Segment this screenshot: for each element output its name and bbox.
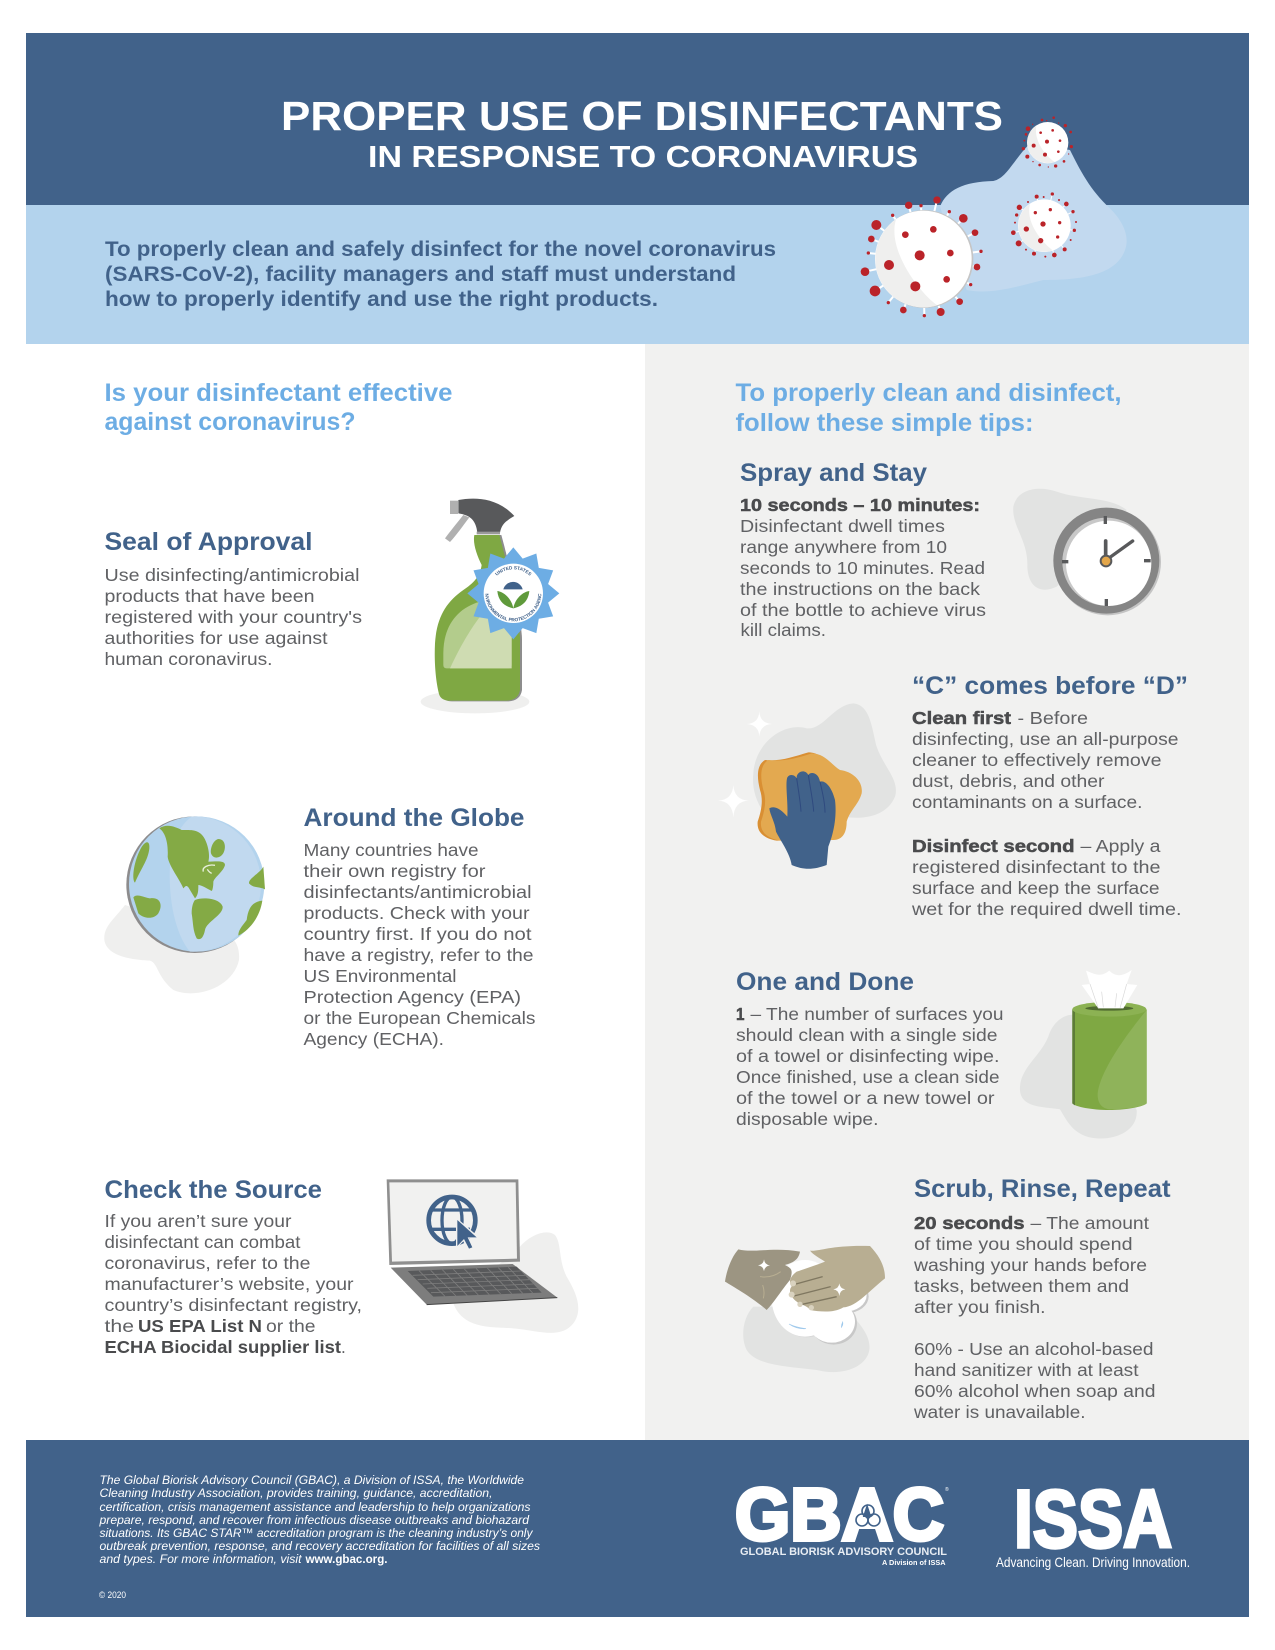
footer text: The Global Biorisk Advisory Council (GBAC), a Division of ISSA, the Worldwide [100,1473,524,1487]
section: one and done text: One and Done [736,968,914,996]
section: around the globe text [304,804,536,1049]
section: spray and stay text: the instructions on the back [740,579,980,599]
section: scrub rinse repeat text: tasks, between them and [914,1276,1129,1296]
section: spray and stay text: 10 seconds – 10 minutes: [740,495,980,515]
copyright: © 2020 [99,1590,126,1600]
section: seal of approval text: registered with your country's [104,607,362,627]
section: seal of approval text: authorities for use against [104,628,328,648]
panel: header [26,33,1249,344]
section: around the globe text: Around the Globe [304,804,525,832]
section: scrub rinse repeat text: 20 seconds [914,1213,1025,1233]
section: C comes before D text: wet for the required dwell time. [911,899,1182,919]
section: C comes before D text [911,672,1188,919]
section: check the source text: . [341,1337,346,1357]
section: seal of approval text: Seal of Approval [104,528,312,556]
section: C comes before D text: Disinfect second [912,836,1074,856]
logo: ISSA: Advancing Clean. Driving Innovation. [996,1554,1190,1570]
section: around the globe text: Protection Agency (EPA) [304,987,521,1007]
section: check the source text: coronavirus, refer to the [104,1253,310,1273]
footer text: Cleaning Industry Association, provides training, guidance, accreditation, [100,1486,492,1500]
section: seal of approval text [104,528,362,669]
footer text: prepare, respond, and recover from infectious disease outbreaks and biohazard [99,1513,530,1527]
section: scrub rinse repeat text: 60% - Use an alcohol-based [914,1339,1154,1359]
logo: GBAC: GLOBAL BIORISK ADVISORY COUNCIL [740,1546,947,1558]
section: C comes before D text: Clean first [912,708,1011,728]
section: spray and stay text: seconds to 10 minutes. Read [740,558,985,578]
panel: footer [26,1440,1249,1617]
icon: clock [1013,489,1161,615]
section: spray and stay text [740,459,986,640]
section: C comes before D text: contaminants on a surface. [912,792,1142,812]
section: around the globe text: have a registry, refer to the [304,945,534,965]
section: spray and stay text: Spray and Stay [740,459,927,487]
section: one and done text: disposable wipe. [736,1109,878,1129]
section: around the globe text: products. Check with your [304,903,530,923]
title: PROPER USE OF DISINFECTANTS [281,93,1003,139]
icon: globe [104,816,265,993]
footer text: and types. For more information, visit [100,1552,302,1566]
footer text: situations. Its GBAC STAR™ accreditation program is the cleaning industry’s only [100,1526,533,1540]
section: C comes before D text: – Apply a [1080,836,1161,856]
intro text: To properly clean and safely disinfect for the novel coronavirus [105,238,776,261]
footer text: certification, crisis management assistance and leadership to help organizations [100,1500,530,1514]
heading: simple tips: follow these simple tips: [736,409,1034,437]
section: seal of approval text: human coronavirus. [104,649,272,669]
logo: GBAC: A Division of ISSA [882,1558,946,1567]
footer text: www.gbac.org. [305,1552,388,1566]
footer text: outbreak prevention, response, and recovery accreditation for facilities of all sizes [100,1539,540,1553]
logo: GBAC: ® [945,1486,949,1493]
section: spray and stay text: of the bottle to achieve virus [740,600,986,620]
section: seal of approval text: Use disinfecting/antimicrobial [104,565,360,585]
section: C comes before D text: cleaner to effectively remove [912,750,1162,770]
intro text: (SARS-CoV-2), facility managers and staff must understand [105,263,736,286]
intro text: how to properly identify and use the right products. [105,288,658,311]
subtitle: IN RESPONSE TO CORONAVIRUS [368,139,918,174]
icon: gloved hand wiping with cloth [718,703,896,869]
icon: coronavirus particles [861,116,1127,317]
section: scrub rinse repeat text: of time you should spend [914,1234,1132,1254]
section: spray and stay text: range anywhere from 10 [740,537,947,557]
heading: simple tips [736,379,1122,437]
intro text [105,238,776,311]
section: C comes before D text: “C” comes before “D” [912,672,1188,700]
section: scrub rinse repeat text: hand sanitizer with at least [914,1360,1139,1380]
section: spray and stay text: kill claims. [740,620,826,640]
section: check the source text: If you aren’t sure your [104,1211,292,1231]
section: check the source text: ECHA Biocidal supplier list [104,1337,341,1357]
section: scrub rinse repeat text: water is unavailable. [913,1402,1086,1422]
icon: spray bottle with EPA seal: UNITED STATES [495,566,532,576]
section: C comes before D text: registered disinfectant to the [912,857,1160,877]
section: around the globe text: disinfectants/antimicrobial [304,882,532,902]
section: around the globe text: Many countries have [304,840,478,860]
heading: is your disinfectant effective [104,379,453,436]
heading: is your disinfectant effective: Is your disinfectant effective [104,379,453,407]
section: C comes before D text: - Before [1018,708,1088,728]
section: around the globe text: US Environmental [304,966,456,986]
section: scrub rinse repeat text: Scrub, Rinse, Repeat [914,1175,1171,1203]
panel: right column background [645,344,1249,1440]
heading: simple tips: To properly clean and disinfect, [736,379,1122,407]
section: check the source text: manufacturer’s website, your [104,1274,354,1294]
section: check the source text [104,1176,362,1357]
section: around the globe text: their own registry for [304,861,486,881]
footer text [99,1473,540,1566]
section: C comes before D text: dust, debris, and other [912,771,1105,791]
section: check the source text: country’s disinfectant registry, [104,1295,362,1315]
section: check the source text: US EPA List N [138,1316,262,1336]
section: seal of approval text: products that have been [104,586,314,606]
section: one and done text: 1 [736,1004,745,1024]
logo: ISSA: ® [1151,1487,1155,1494]
section: scrub rinse repeat text: after you finish. [914,1297,1046,1317]
section: around the globe text: Agency (ECHA). [304,1029,444,1049]
section: check the source text: Check the Source [104,1176,322,1204]
section: check the source text: disinfectant can combat [104,1232,301,1252]
section: one and done text: of a towel or disinfecting wipe. [736,1046,1000,1066]
section: spray and stay text: Disinfectant dwell times [740,516,945,536]
section: scrub rinse repeat text: 60% alcohol when soap and [914,1381,1156,1401]
section: C comes before D text: disinfecting, use an all-purpose [912,729,1178,749]
logo: GBAC: GBAC [735,1473,944,1556]
section: one and done text: of the towel or a new towel or [736,1088,995,1108]
section: C comes before D text: surface and keep the surface [912,878,1160,898]
section: scrub rinse repeat text: washing your hands before [913,1255,1147,1275]
logo: ISSA: ISSA [1014,1474,1172,1565]
section: one and done text: – The number of surfaces you [750,1004,1004,1024]
section: one and done text: should clean with a single side [736,1025,998,1045]
section: around the globe text: or the European Chemicals [304,1008,536,1028]
section: check the source text: the [104,1316,134,1336]
section: one and done text: Once finished, use a clean side [736,1067,1000,1087]
icon: spray bottle with EPA seal [420,498,560,714]
icon: spray bottle with EPA seal: ENVIRONMENTAL PROTECTION AGENCY [485,594,542,622]
icon: laptop [387,1179,578,1333]
heading: is your disinfectant effective: against coronavirus? [104,408,356,436]
section: scrub rinse repeat text [913,1175,1171,1422]
icon: tissue box [1020,970,1147,1139]
section: one and done text [736,968,1004,1129]
section: check the source text: or the [266,1316,316,1336]
icon: washing hands with soap [725,1246,885,1372]
section: scrub rinse repeat text: – The amount [1030,1213,1149,1233]
section: around the globe text: country first. If you do not [304,924,532,944]
